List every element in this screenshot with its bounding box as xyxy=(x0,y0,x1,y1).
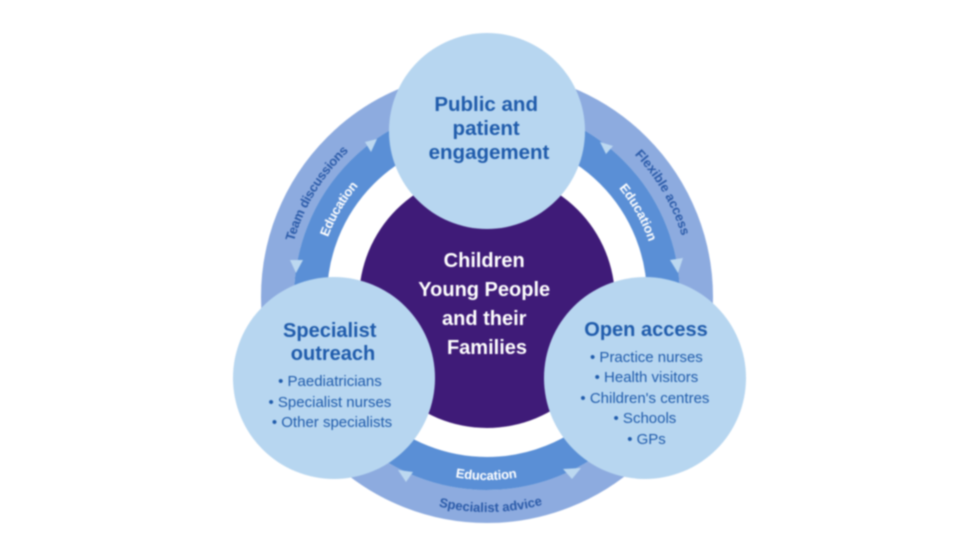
left circle: specialist outreach: • Other specialists xyxy=(272,414,392,431)
top circle: public and patient engagement xyxy=(389,33,585,229)
inner education ring xyxy=(310,120,664,474)
label: education right: Education xyxy=(618,182,656,242)
arrowheads xyxy=(290,139,683,482)
right circle: open access: • Children's centres xyxy=(580,390,709,407)
left circle: specialist outreach xyxy=(233,277,435,479)
centre circle: children and families: Young People xyxy=(418,279,550,301)
right circle: open access: • GPs xyxy=(627,431,666,448)
right circle: open access: • Health visitors xyxy=(595,369,698,386)
centre circle: children and families: Children xyxy=(444,250,525,272)
top circle: public and patient engagement: engagement xyxy=(429,141,550,164)
right circle: open access: Open access xyxy=(584,319,708,341)
left circle: specialist outreach: outreach xyxy=(291,343,375,365)
label: team discussions: Team discussions xyxy=(284,146,348,240)
left circle: specialist outreach: • Paediatricians xyxy=(278,373,382,390)
right circle: open access xyxy=(544,277,746,479)
outer ring xyxy=(278,88,696,506)
left circle: specialist outreach: • Specialist nurses xyxy=(269,394,391,411)
centre circle: children and families: and their xyxy=(442,308,527,330)
top circle: public and patient engagement: patient xyxy=(453,117,520,140)
label: education left: Education xyxy=(319,182,358,238)
centre circle: children and families xyxy=(359,172,615,428)
right circle: open access: • Practice nurses xyxy=(590,349,703,366)
label: flexible access: Flexible access xyxy=(634,148,688,236)
label: education bottom: Education xyxy=(455,468,518,482)
centre circle: children and families: Families xyxy=(447,337,527,359)
left circle: specialist outreach: Specialist xyxy=(283,320,377,342)
label: specialist advice: Specialist advice xyxy=(439,498,542,513)
right circle: open access: • Schools xyxy=(614,410,676,427)
top circle: public and patient engagement: Public and xyxy=(434,93,538,116)
